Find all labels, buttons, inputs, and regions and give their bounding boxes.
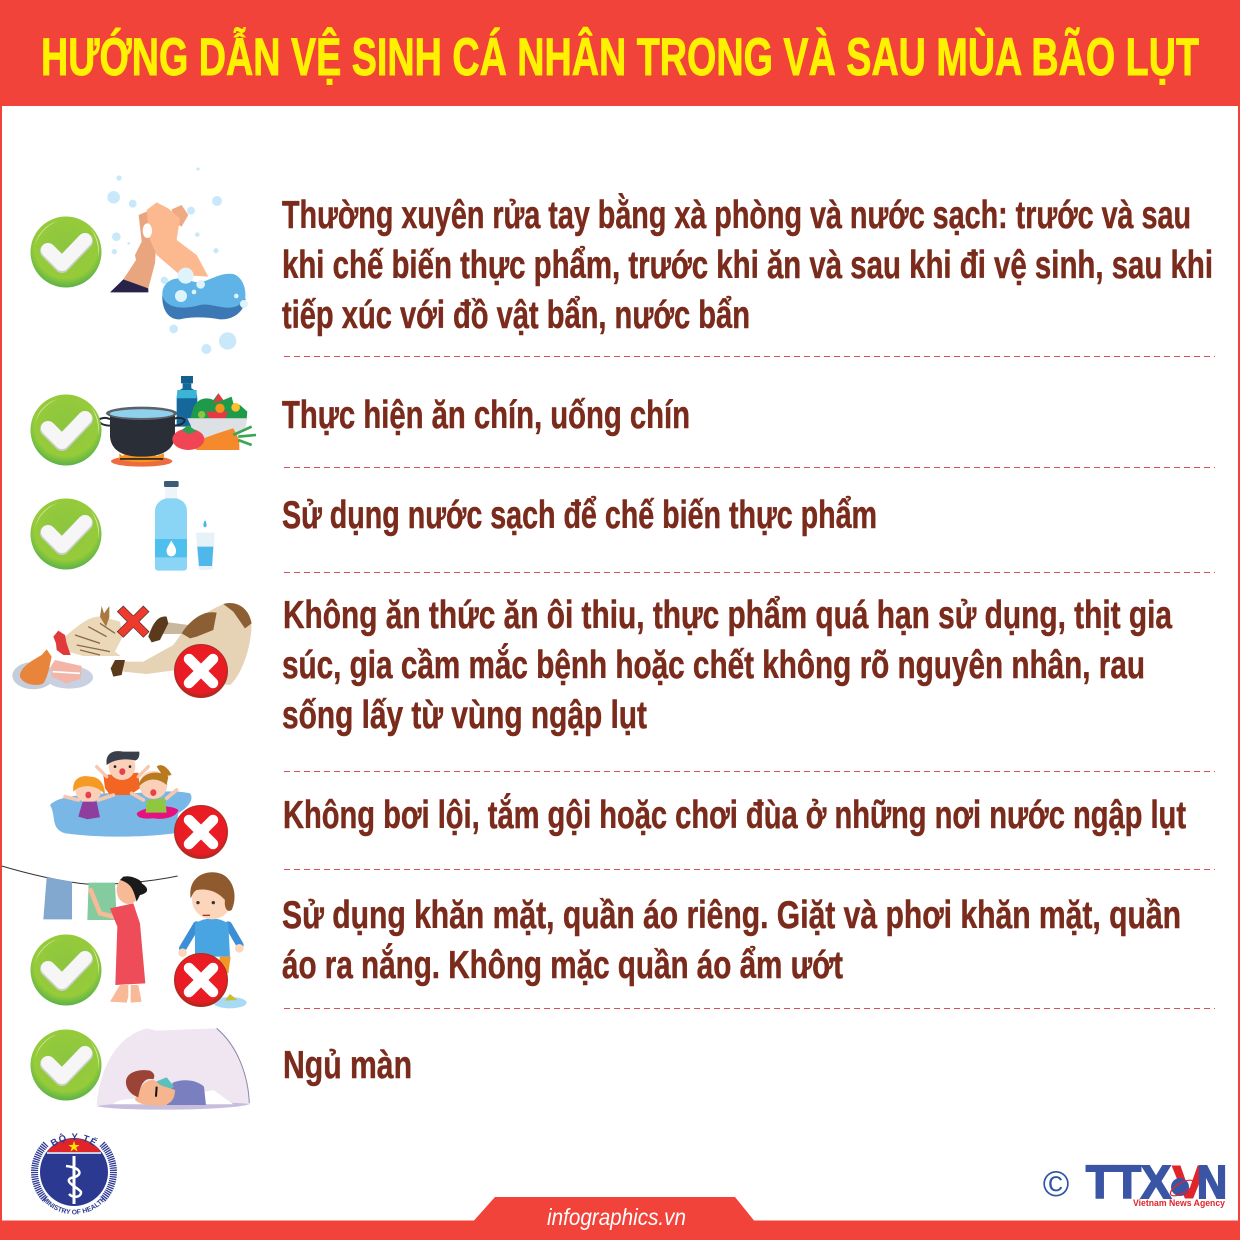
logo: ministry of health: BỘ Y TẾ — [50, 1133, 98, 1146]
text block: mosquito net: Ngủ màn — [283, 1044, 412, 1087]
icon: prohibited mark on swimming — [174, 806, 228, 858]
copyright and TTXVN logo: TTX — [1086, 1156, 1171, 1208]
footer band — [0, 1197, 1240, 1240]
icon: dead chicken, raw food and dead cow — [12, 603, 252, 689]
icon: check 2 — [30, 394, 102, 466]
text block: spoiled food — [282, 594, 1172, 737]
icon: hand washing with sponge — [107, 167, 248, 354]
logo: ministry of health: MINISTRY OF HEALTH — [42, 1196, 106, 1214]
icon: bottle and glass of water — [155, 481, 215, 571]
icon: prohibited mark on wet clothes — [174, 954, 228, 1006]
text block: spoiled food: sống lấy từ vùng ngập lụt — [282, 694, 647, 737]
text block: towels and clothes: áo ra nắng. Không mặc quần áo ẩm ướt — [282, 943, 843, 987]
copyright and TTXVN logo — [1043, 1156, 1227, 1208]
icon: check 3 — [30, 498, 102, 570]
icon: check 7 — [30, 1030, 102, 1100]
copyright and TTXVN logo: Vietnam News Agency — [1133, 1198, 1225, 1208]
text block: clean water: Sử dụng nước sạch để chế biến thực phẩm — [282, 494, 877, 537]
header band — [0, 0, 1240, 106]
icon: check 1 — [30, 216, 102, 288]
copyright and TTXVN logo: V — [1172, 1156, 1206, 1208]
icon: children playing in flood water — [50, 751, 191, 837]
text block: towels and clothes — [282, 894, 1181, 987]
copyright and TTXVN logo: N — [1197, 1156, 1227, 1208]
text block: hand washing: tiếp xúc với đồ vật bẩn, nước bẩn — [282, 294, 750, 337]
copyright and TTXVN logo: © — [1043, 1163, 1069, 1204]
icon: pot, water bottle and vegetables — [99, 376, 256, 467]
text block: hand washing — [282, 193, 1213, 337]
icon: prohibited mark on food — [174, 644, 228, 698]
logo: ministry of health — [31, 1133, 117, 1214]
icon: clothesline, woman hanging towels and wet boy — [2, 866, 247, 1008]
footer url: infographics.vn — [547, 1204, 686, 1230]
icon: person sleeping under mosquito net — [96, 1028, 250, 1110]
text block: cooked food: Thực hiện ăn chín, uống chín — [282, 394, 690, 437]
icon: check 6 — [30, 934, 102, 1006]
